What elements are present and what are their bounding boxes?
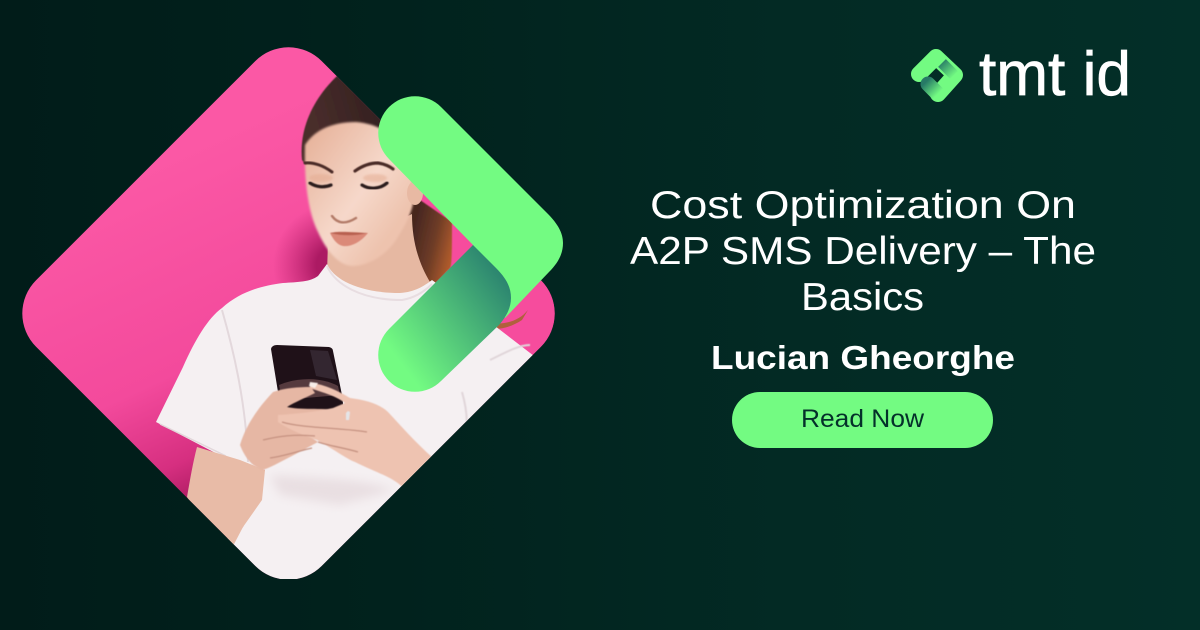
icon: large green chevron (378, 96, 563, 392)
eyelid tint (309, 174, 387, 182)
hand: right (278, 383, 433, 488)
title: Basics (801, 276, 924, 319)
nose shadow (332, 216, 356, 222)
hand: left (240, 386, 328, 470)
eyebrows (305, 163, 393, 172)
title: A2P SMS Delivery – The (630, 230, 1096, 273)
button: read now: Read Now (801, 405, 925, 433)
chevron lower bar (378, 245, 511, 392)
logo wordmark: tmt id (979, 40, 1131, 109)
logo mark (919, 57, 955, 94)
button: read now (732, 392, 993, 448)
face (305, 122, 423, 266)
white t-shirt (156, 264, 533, 579)
lips (330, 232, 368, 246)
neck (327, 214, 430, 293)
logo: tmt id (919, 40, 1131, 109)
phone (271, 345, 344, 410)
chevron upper bar (378, 96, 563, 318)
eyes (310, 183, 387, 188)
author name: Lucian Gheorghe (711, 339, 1015, 376)
hair (302, 76, 528, 329)
title: Cost Optimization On (650, 184, 1076, 227)
left forearm (187, 447, 265, 548)
hands (240, 382, 433, 488)
pink backdrop (22, 47, 555, 579)
photo: woman holding a phone on pink diamond (22, 47, 555, 579)
title (630, 184, 1096, 319)
